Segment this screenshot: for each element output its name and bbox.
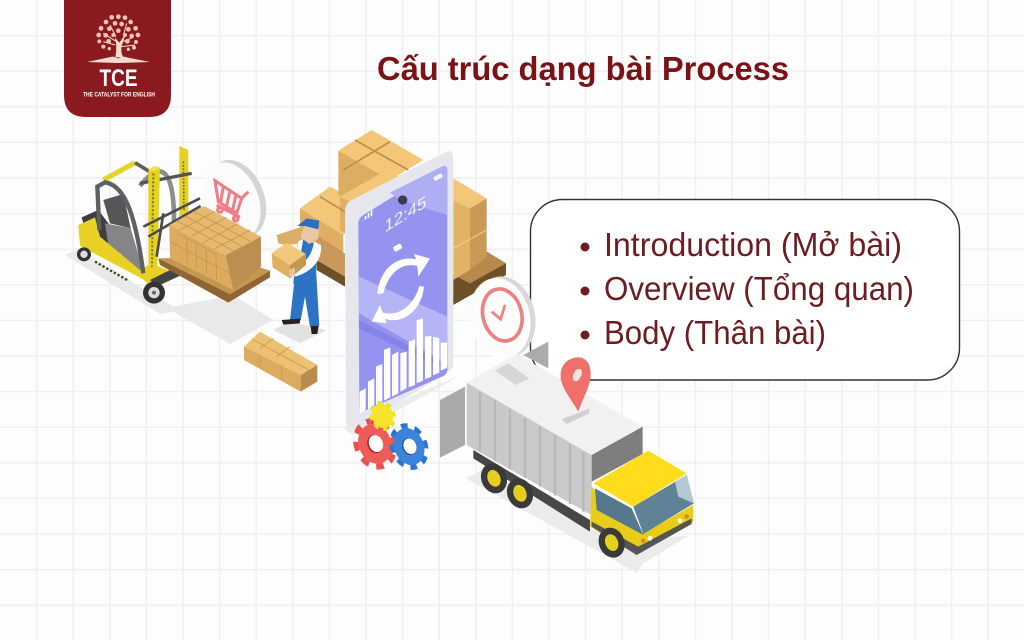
- stacked pallets behind phone: [300, 130, 506, 305]
- clock text: 12:45: [385, 192, 426, 236]
- camera: [398, 195, 407, 205]
- forklift: [77, 146, 201, 304]
- pallet load: [158, 206, 270, 303]
- callout box: [530, 200, 960, 380]
- worker: [272, 218, 321, 334]
- truck cab: [590, 487, 693, 554]
- logo tree: [96, 14, 140, 57]
- small box group on floor: [244, 332, 317, 392]
- delivery truck: [440, 342, 694, 573]
- yellow gear: [367, 399, 399, 433]
- bullet list: Overview (Tổng quan): [604, 270, 914, 307]
- blue gear: [386, 421, 432, 473]
- red gear: [349, 415, 401, 473]
- logo tagline: THE CATALYST FOR ENGLISH: [83, 92, 155, 98]
- front truck wheel: [594, 524, 629, 562]
- sync arrows: [372, 254, 430, 323]
- cart bubble: [192, 151, 277, 248]
- rear truck wheels: [477, 459, 537, 512]
- forklift and worker scene: [65, 146, 327, 392]
- title: Cấu trúc dạng bài Process: [377, 50, 789, 87]
- cart icon: [215, 181, 248, 221]
- logo open book: [87, 56, 150, 63]
- bar chart: [360, 318, 447, 414]
- bullet list: Introduction (Mở bài): [604, 226, 902, 263]
- logo wordmark: TCE: [100, 65, 138, 92]
- gears: [349, 399, 432, 473]
- bullet list: [580, 226, 914, 351]
- smartphone: [343, 151, 457, 435]
- ground shadow: [65, 249, 273, 344]
- logo badge: [64, 0, 171, 117]
- location pin: [561, 357, 591, 412]
- bullet list: Body (Thân bài): [604, 314, 826, 351]
- truck shadow: [466, 470, 688, 573]
- clock icon: [477, 285, 527, 345]
- clock bubble: [462, 271, 543, 364]
